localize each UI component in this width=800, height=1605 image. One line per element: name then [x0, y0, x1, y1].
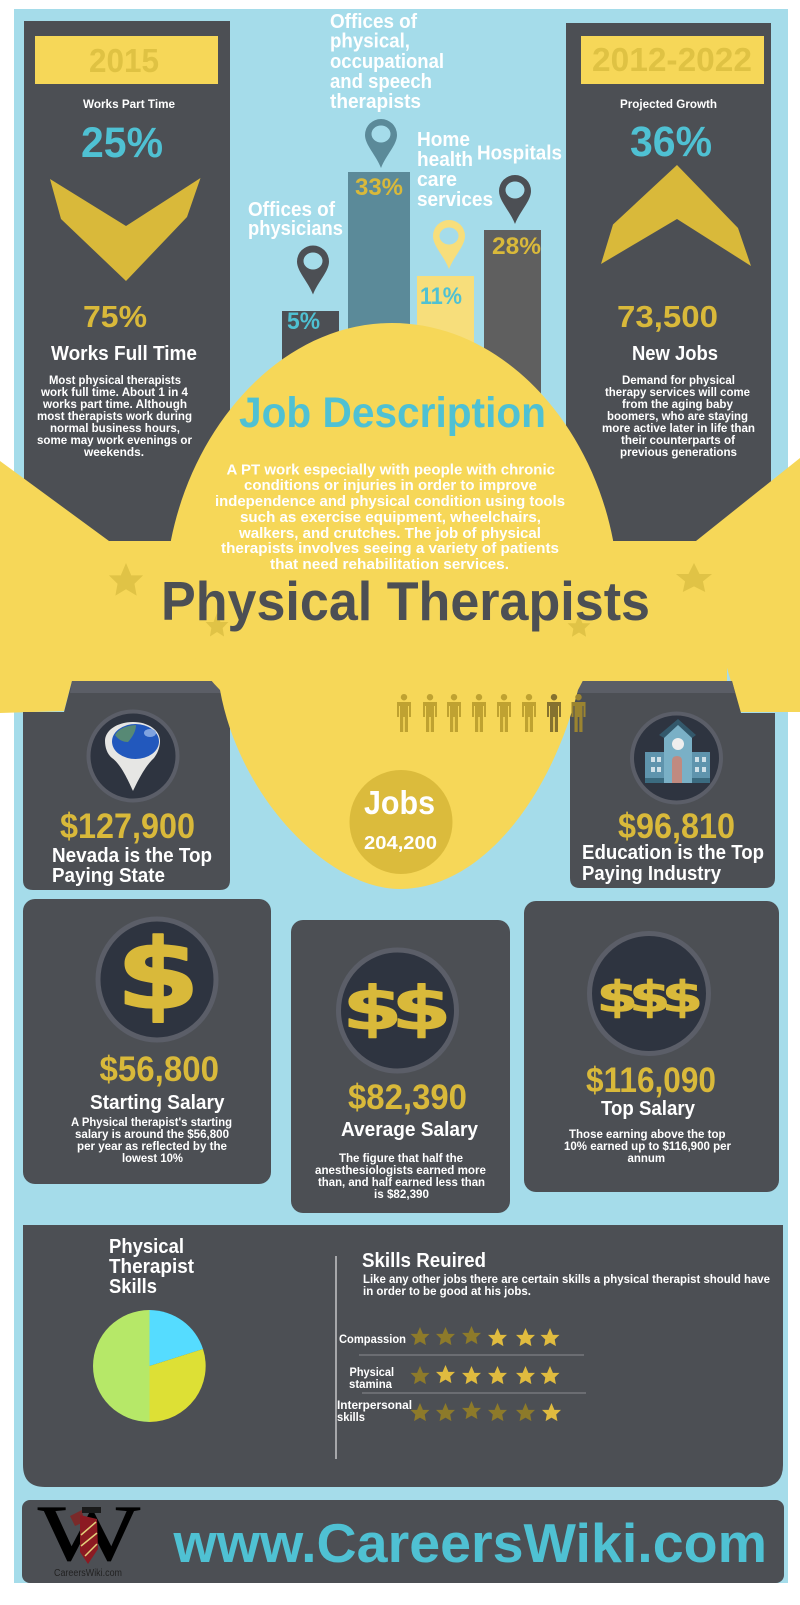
bar: offices of physicians: 5% — [287, 308, 320, 335]
text block: average salary description: is $82,390 — [374, 1187, 429, 1201]
text block: growth description: their counterparts of — [621, 433, 736, 447]
text block: growth description: Demand for physical — [622, 373, 735, 387]
label: new jobs: New Jobs — [632, 343, 718, 365]
text block: full time description — [37, 373, 192, 459]
bar: offices of physicians: Offices of — [248, 199, 335, 221]
skill row: physical stamina: Physical — [350, 1365, 394, 1379]
bar: offices of physical, occupational and speech therapists: occupational — [330, 51, 444, 73]
text block: job description: walkers, and crutches. The job of physical — [238, 525, 541, 542]
text block: growth description: therapy services will come — [605, 385, 750, 399]
text block: top salary description: Those earning above the top — [569, 1127, 726, 1141]
text block: average salary description: anesthesiologists earned more — [315, 1163, 486, 1177]
website url: www.CareersWiki.com — [172, 1512, 767, 1574]
text block: starting salary description: lowest 10% — [122, 1151, 183, 1165]
icon: double dollar — [338, 950, 456, 1071]
text block: job description: independence and physical condition using tools — [215, 493, 565, 510]
skill row: interpersonal skills — [337, 1398, 561, 1424]
text block: growth description: more active later in life than — [602, 421, 755, 435]
heading: job description: Job Description — [239, 389, 546, 437]
text block: top salary description: annum — [628, 1151, 665, 1165]
text block: growth description: from the aging baby — [622, 397, 733, 411]
text block: full time description: normal business hours, — [50, 421, 180, 435]
stat: 36%: 36% — [630, 118, 712, 166]
icon: row of people — [397, 694, 586, 732]
text block: job description: therapists involves seeing a variety of patients — [221, 540, 559, 557]
decorative ribbon stars — [109, 563, 712, 637]
skill row: physical stamina: stamina — [349, 1377, 392, 1391]
icon: school building — [632, 714, 721, 802]
panel: starting salary — [23, 899, 271, 1184]
text block: top salary description: 10% earned up to $116,900 per — [564, 1139, 731, 1153]
text block: job description — [215, 462, 565, 573]
text block: skills intro: Like any other jobs there are certain skills a physical therapist should have — [363, 1272, 770, 1286]
stat: 75%: 75% — [83, 299, 147, 334]
label: Nevada top paying state: Nevada is the Top — [52, 845, 212, 867]
text block: growth description: boomers, who are staying — [607, 409, 748, 423]
panel: top salary — [524, 901, 779, 1192]
jobs badge — [350, 770, 452, 874]
bar: offices of physicians — [248, 199, 343, 461]
label: works part time: Works Part Time — [83, 97, 175, 111]
ribbon banner — [0, 458, 800, 713]
stat: 25%: 25% — [81, 119, 163, 167]
bar: home health care services: health — [417, 149, 473, 171]
text block: full time description: work full time. About 1 in 4 — [40, 385, 188, 399]
heading: physical therapist skills: Physical — [109, 1236, 184, 1258]
panel: top paying state — [23, 681, 230, 890]
bar: offices of physical, occupational and speech therapists: Offices of — [330, 11, 417, 33]
text block: job description: conditions or injuries in order to improve — [244, 477, 537, 494]
text block: full time description: some may work evenings or — [37, 433, 192, 447]
label: Nevada top paying state — [52, 845, 212, 887]
skill row: interpersonal skills: Interpersonal — [337, 1398, 412, 1412]
stat: $82,390: $82,390 — [348, 1078, 467, 1117]
text block: skills intro — [363, 1272, 770, 1298]
stat: 73,500: 73,500 — [617, 299, 718, 334]
bar: home health care services: 11% — [420, 283, 462, 310]
icon: double dollar: $$ — [342, 973, 451, 1044]
label: starting salary: Starting Salary — [90, 1092, 225, 1114]
label: education top paying industry — [582, 842, 764, 885]
icon: triple dollar: $$$ — [597, 972, 703, 1022]
heading: skills required: Skills Reuired — [362, 1250, 486, 1272]
label: average salary: Average Salary — [341, 1119, 479, 1141]
divider line — [336, 1256, 337, 1459]
heading: physical therapist skills: Skills — [109, 1276, 157, 1298]
logo: W — [38, 1491, 141, 1578]
logo: CareersWiki.com — [54, 1568, 122, 1579]
label: education top paying industry: Paying Industry — [582, 863, 722, 885]
skill row: interpersonal skills: skills — [337, 1410, 365, 1424]
text block: growth description: previous generations — [620, 445, 737, 459]
central egg shape — [170, 323, 614, 889]
text block: growth description — [602, 373, 755, 459]
bar: offices of physical, occupational and speech therapists: 33% — [355, 174, 403, 201]
label: Nevada top paying state: Paying State — [52, 865, 165, 887]
text block: average salary description: The figure that half the — [339, 1151, 463, 1165]
text block: full time description: Most physical therapists — [49, 373, 181, 387]
stat: $96,810: $96,810 — [618, 807, 735, 846]
icon: single dollar — [98, 918, 216, 1040]
text block: average salary description — [315, 1151, 486, 1201]
bar: home health care services: services — [417, 189, 493, 211]
bar: hospitals: 28% — [492, 233, 541, 260]
text block: job description: that need rehabilitation services. — [270, 556, 509, 573]
stat: $116,090: $116,090 — [586, 1061, 716, 1100]
text block: job description: such as exercise equipment, wheelchairs, — [240, 509, 541, 526]
text block: top salary description — [564, 1127, 731, 1165]
year banner 2012-2022: 2012-2022 — [592, 41, 752, 78]
skill row: physical stamina — [349, 1365, 560, 1391]
text block: job description: A PT work especially with people with chronic — [226, 462, 555, 478]
panel: average salary — [291, 920, 510, 1213]
text block: full time description: most therapists work during — [37, 409, 192, 423]
skill row: compassion: Compassion — [339, 1332, 406, 1346]
bar: offices of physical, occupational and speech therapists: therapists — [330, 91, 421, 113]
bar: offices of physical, occupational and speech therapists — [330, 11, 444, 462]
text block: average salary description: than, and half earned less than — [318, 1175, 485, 1189]
pie chart — [93, 1310, 206, 1422]
footer bar — [22, 1491, 784, 1583]
year banner 2015: 2015 — [89, 42, 159, 79]
year banner 2015 — [35, 36, 218, 84]
bar: offices of physicians: physicians — [248, 218, 343, 240]
stat: $127,900: $127,900 — [60, 807, 195, 846]
icon: up chevron — [601, 165, 751, 266]
skill row: compassion — [339, 1326, 560, 1346]
text block: starting salary description: per year as reflected by the — [77, 1139, 227, 1153]
year banner 2012-2022 — [581, 36, 764, 84]
label: works full time: Works Full Time — [51, 343, 197, 365]
label: projected growth: Projected Growth — [620, 97, 717, 111]
icon: single dollar: $ — [116, 918, 200, 1031]
label: top salary: Top Salary — [601, 1098, 696, 1120]
title: Physical Therapists — [161, 570, 650, 632]
panel: skills — [23, 1225, 783, 1487]
bar: home health care services: care — [417, 169, 457, 191]
bar: hospitals: Hospitals — [477, 142, 562, 164]
bar: offices of physical, occupational and speech therapists: and speech — [330, 71, 432, 93]
icon: triple dollar — [590, 934, 708, 1054]
icon: down chevron — [50, 178, 200, 281]
text block: starting salary description — [71, 1115, 232, 1165]
text block: skills intro: in order to be good at his jobs. — [363, 1284, 531, 1298]
bar: home health care services: Home — [417, 129, 470, 151]
text block: full time description: works part time. Although — [42, 397, 187, 411]
panel: 2012-2022 projected growth — [566, 23, 771, 551]
bar chart: where therapists work — [248, 11, 562, 462]
bar: hospitals — [477, 142, 562, 462]
bar: home health care services — [417, 129, 493, 461]
jobs badge: Jobs — [364, 784, 435, 821]
panel: top paying industry — [570, 681, 775, 888]
stat: $56,800: $56,800 — [100, 1050, 219, 1089]
label: education top paying industry: Education is the Top — [582, 842, 764, 864]
panel: 2015 work status — [24, 21, 230, 551]
icon: Nevada map pin — [88, 712, 178, 800]
text block: full time description: weekends. — [83, 445, 144, 459]
bar: offices of physical, occupational and speech therapists: physical, — [330, 30, 410, 52]
text block: starting salary description: A Physical therapist's starting — [71, 1115, 232, 1129]
heading: physical therapist skills: Therapist — [109, 1256, 194, 1278]
text block: starting salary description: salary is around the $56,800 — [75, 1127, 229, 1141]
heading: physical therapist skills — [109, 1236, 194, 1298]
jobs badge: 204,200 — [364, 833, 437, 853]
